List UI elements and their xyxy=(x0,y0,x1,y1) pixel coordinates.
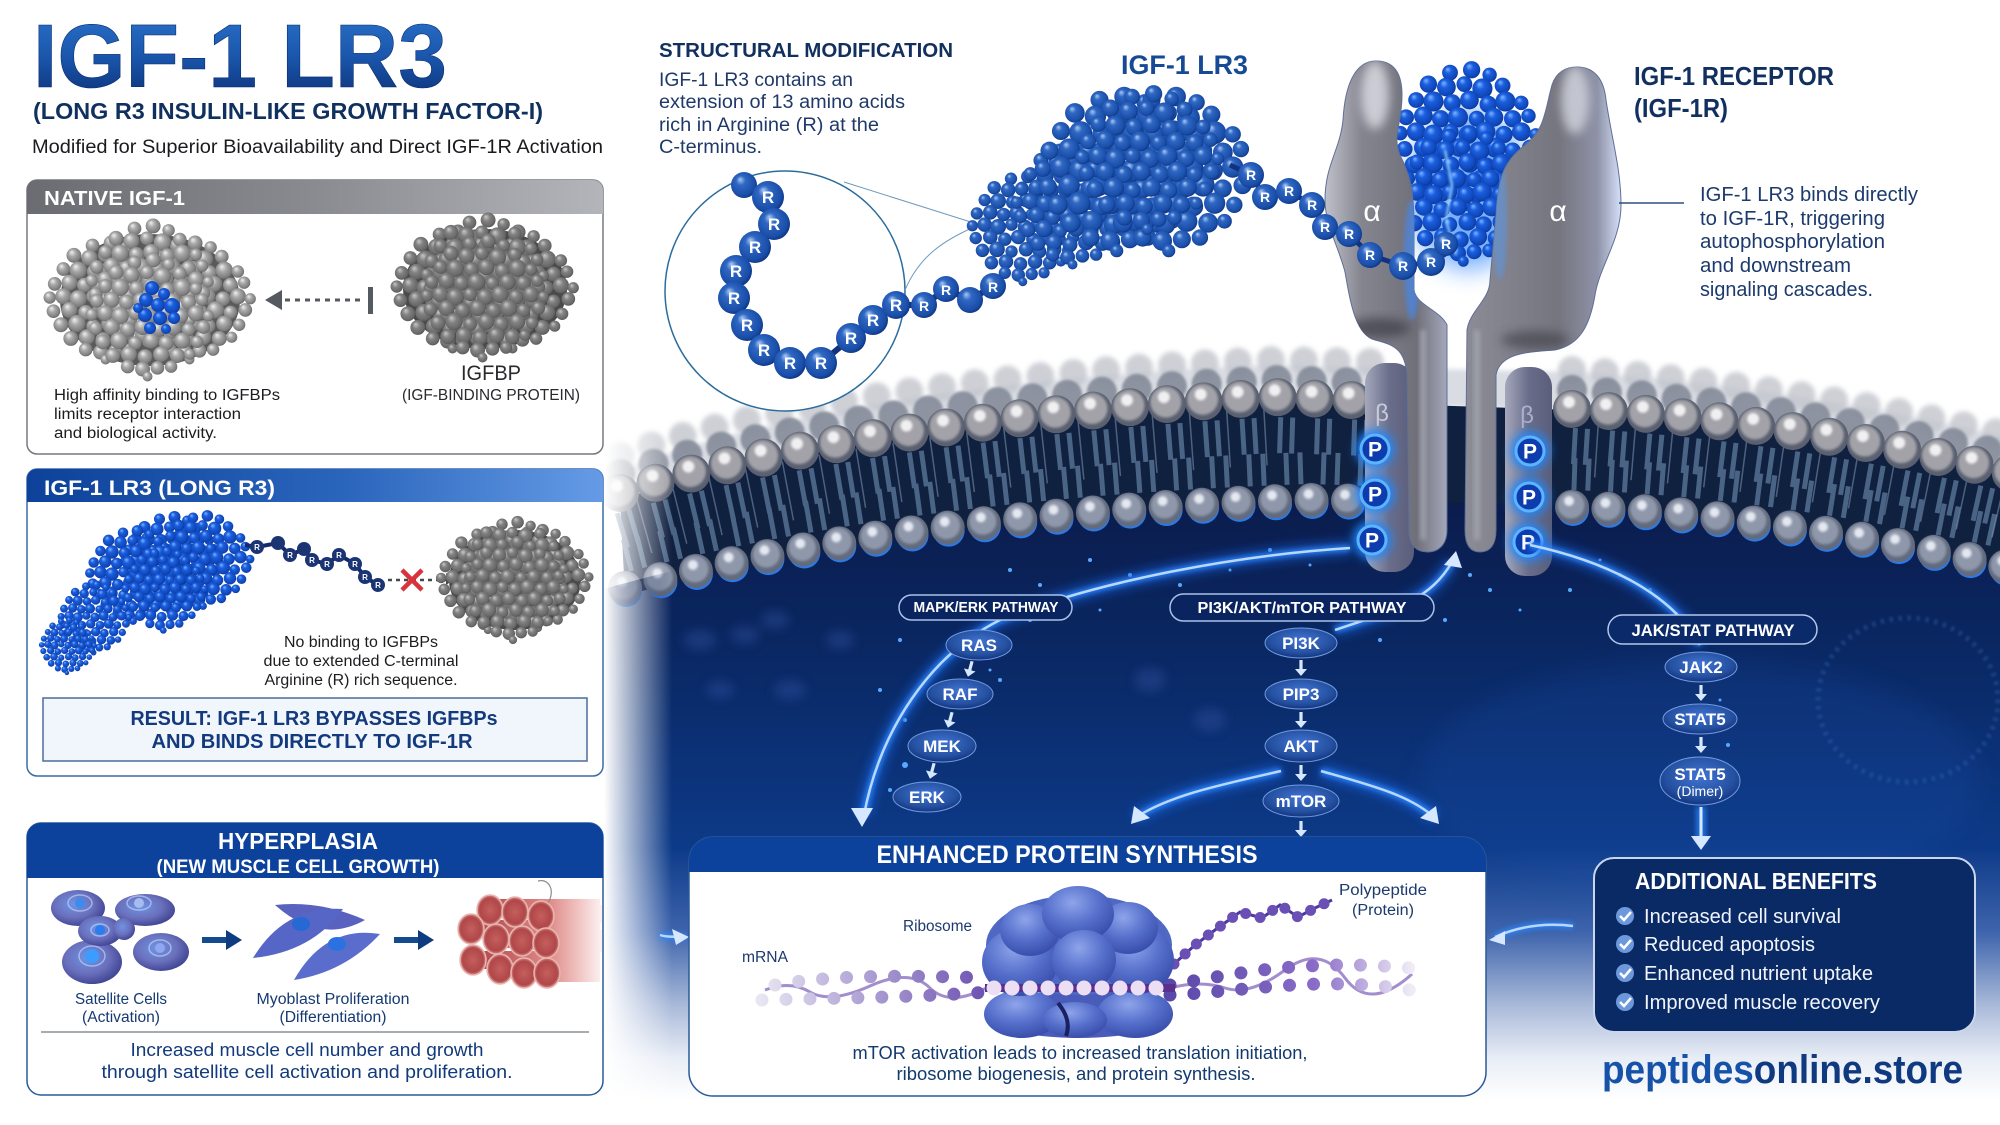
description: limits receptor interaction xyxy=(54,406,241,423)
description: due to extended C-terminal xyxy=(264,653,458,670)
description: and biological activity. xyxy=(54,425,217,442)
description: mTOR activation leads to increased translation initiation, xyxy=(852,1043,1308,1063)
receptor label xyxy=(1634,61,1834,123)
R chain: R xyxy=(730,262,742,281)
subtitle: (LONG R3 INSULIN-LIKE GROWTH FACTOR-I) xyxy=(33,98,543,124)
R chain: R xyxy=(324,560,330,569)
description: Arginine (R) rich sequence. xyxy=(264,672,458,689)
R chain: R xyxy=(890,296,902,315)
receptor description: IGF-1 LR3 binds directly xyxy=(1700,184,1918,206)
linker chain to receptor: R xyxy=(1284,183,1294,199)
R chain: R xyxy=(287,551,293,560)
R chain: R xyxy=(867,311,879,330)
check icons xyxy=(1616,907,1634,1011)
pathway: PI3K/AKT/mTOR: AKT xyxy=(1284,737,1319,756)
beta subunits xyxy=(1365,363,1552,576)
pill label xyxy=(1170,594,1434,621)
blocked arrow xyxy=(388,570,455,590)
satellite cells xyxy=(51,890,189,984)
result callout: RESULT: IGF-1 LR3 BYPASSES IGFBPs xyxy=(130,708,498,730)
R chain: R xyxy=(375,581,381,590)
membrane surface back rows xyxy=(620,360,2000,490)
R chain: R xyxy=(941,282,951,298)
receptor alpha right arm xyxy=(1465,66,1621,552)
label mRNA: mRNA xyxy=(742,949,789,966)
receptor description xyxy=(1700,184,1918,301)
linker chain to receptor: R xyxy=(1426,254,1436,270)
linker chain to receptor: R xyxy=(1365,247,1375,263)
benefits list xyxy=(1644,906,1880,1014)
beta subunits: β xyxy=(1520,402,1534,429)
result callout xyxy=(43,698,587,761)
subheading: (NEW MUSCLE CELL GROWTH) xyxy=(156,857,440,878)
description: ribosome biogenesis, and protein synthesis. xyxy=(896,1064,1256,1084)
cell interior xyxy=(600,480,2000,1125)
panel: enhanced protein synthesis xyxy=(689,837,1486,1096)
phosphate groups right xyxy=(1509,432,1549,561)
native IGF-1 molecule xyxy=(44,219,256,381)
receptor label: (IGF-1R) xyxy=(1634,93,1728,123)
description xyxy=(264,634,458,689)
R chain: R xyxy=(352,560,358,569)
upper lipid heads xyxy=(617,390,2000,493)
cell membrane xyxy=(617,360,2000,596)
linker chain to receptor xyxy=(1230,162,1458,280)
R chain: R xyxy=(762,188,774,207)
R chain: R xyxy=(919,298,929,314)
beta subunits: β xyxy=(1375,400,1389,427)
description: No binding to IGFBPs xyxy=(284,634,438,651)
long arrow xyxy=(1691,807,1711,850)
faint nucleus xyxy=(1818,618,1998,782)
faint bokeh xyxy=(684,611,1226,732)
summary text: through satellite cell activation and proliferation. xyxy=(102,1061,512,1082)
receptor label: IGF-1 RECEPTOR xyxy=(1634,61,1834,91)
panel: native IGF-1 xyxy=(27,180,603,454)
LR3 molecule xyxy=(39,510,254,675)
pathway: JAK/STAT: JAK2 xyxy=(1679,658,1723,677)
phosphate groups right: P xyxy=(1522,486,1536,510)
label polypeptide xyxy=(1339,882,1427,919)
polypeptide chain xyxy=(1174,900,1332,964)
label satellite cells xyxy=(75,991,167,1026)
arrow xyxy=(202,930,242,950)
linker chain to receptor: R xyxy=(1320,219,1330,235)
panel: hyperplasia xyxy=(27,823,603,1095)
pathway: MAPK/ERK: MEK xyxy=(923,737,962,756)
R chain xyxy=(245,536,385,592)
description: High affinity binding to IGFBPs xyxy=(54,387,280,404)
R chain: R xyxy=(815,354,827,373)
label myoblast xyxy=(256,991,410,1026)
pathway: PI3K/AKT/mTOR: PI3K xyxy=(1282,634,1321,653)
R chain: R xyxy=(336,551,342,560)
IGFBP sublabel: (IGF-BINDING PROTEIN) xyxy=(402,387,580,404)
mRNA strand xyxy=(762,959,1412,1000)
ribosome xyxy=(982,886,1175,1038)
receptor description: and downstream xyxy=(1700,255,1851,277)
benefits list: Increased cell survival xyxy=(1644,906,1841,928)
pathway: JAK/STAT: STAT5 xyxy=(1674,710,1726,729)
membrane band xyxy=(620,400,2000,596)
R chain: R xyxy=(728,289,740,308)
R chain: R xyxy=(988,279,998,295)
receptor alpha left arm xyxy=(1325,61,1447,552)
summary text xyxy=(102,1039,512,1082)
pathway: JAK/STAT: (Dimer) xyxy=(1677,783,1723,799)
R chain: R xyxy=(784,354,796,373)
pathway: MAPK/ERK: RAS xyxy=(961,636,997,655)
magnifier circle xyxy=(665,171,974,411)
pathway: JAK/STAT: STAT5 xyxy=(1674,765,1726,784)
IGFBP molecule xyxy=(436,516,594,644)
phosphate groups right: P xyxy=(1521,532,1535,554)
lower lipid heads xyxy=(622,494,2000,591)
panel: IGF-1 LR3 xyxy=(27,469,603,776)
structural modification heading: STRUCTURAL MODIFICATION xyxy=(659,39,953,62)
tagline: Modified for Superior Bioavailability and Direct IGF-1R Activation xyxy=(32,137,603,158)
heading: HYPERPLASIA xyxy=(218,828,378,854)
pathway: MAPK/ERK: RAF xyxy=(943,685,977,704)
label polypeptide: Polypeptide xyxy=(1339,882,1427,899)
signal curves xyxy=(660,545,1700,937)
linker chain to receptor: R xyxy=(1260,189,1270,205)
phosphate groups left xyxy=(1353,430,1394,559)
R chain: R xyxy=(758,341,770,360)
alpha labels: α xyxy=(1549,195,1567,228)
R chain: R xyxy=(845,329,857,348)
heading: ENHANCED PROTEIN SYNTHESIS xyxy=(876,841,1258,869)
pathway: JAK/STAT xyxy=(1608,615,1817,850)
R chain: R xyxy=(362,573,368,582)
R chain: R xyxy=(768,215,780,234)
phosphate groups left: P xyxy=(1368,484,1382,506)
pill label xyxy=(899,595,1072,620)
heading: IGF-1 LR3 (LONG R3) xyxy=(44,477,275,500)
website: peptidesonline.store xyxy=(1602,1048,1963,1092)
label myoblast: (Differentiation) xyxy=(280,1009,386,1026)
pill label: PI3K/AKT/mTOR PATHWAY xyxy=(1198,600,1407,617)
pathway: MAPK/ERK: ERK xyxy=(909,788,946,807)
IGF-1 LR3 molecule xyxy=(967,85,1256,286)
heading: NATIVE IGF-1 xyxy=(44,187,185,210)
benefits list: Reduced apoptosis xyxy=(1644,934,1815,956)
arrowheads xyxy=(672,551,1505,945)
benefits list: Improved muscle recovery xyxy=(1644,992,1880,1014)
myoblasts xyxy=(253,904,380,980)
structural modification text: rich in Arginine (R) at the xyxy=(659,115,879,136)
IGFBP label: IGFBP xyxy=(461,362,521,385)
title: IGF-1 LR3 xyxy=(33,7,447,107)
glowing sparkles xyxy=(878,548,1730,792)
structural modification text: IGF-1 LR3 contains an xyxy=(659,70,853,91)
linker chain to receptor: R xyxy=(1307,197,1317,213)
R chain: R xyxy=(749,238,761,257)
R chain: R xyxy=(309,556,315,565)
pill label: MAPK/ERK PATHWAY xyxy=(914,599,1058,616)
IGFBP molecule xyxy=(391,213,579,362)
heading: ADDITIONAL BENEFITS xyxy=(1635,868,1877,894)
arrow xyxy=(394,930,434,950)
receptor description: to IGF-1R, triggering xyxy=(1700,208,1885,230)
pathway: MAPK/ERK xyxy=(893,595,1072,812)
label ribosome: Ribosome xyxy=(903,918,972,935)
structural modification text xyxy=(659,70,905,158)
structural modification text: C-terminus. xyxy=(659,137,762,158)
alpha labels: α xyxy=(1363,195,1381,228)
receptor description: autophosphorylation xyxy=(1700,231,1885,253)
lipid tails xyxy=(620,435,2000,556)
panel: additional benefits xyxy=(1594,858,1975,1032)
R chain: R xyxy=(254,543,260,552)
result callout: AND BINDS DIRECTLY TO IGF-1R xyxy=(152,731,473,753)
receptor description: signaling cascades. xyxy=(1700,279,1873,301)
linker chain to receptor: R xyxy=(1246,167,1256,183)
pathway: PI3K/AKT/mTOR: mTOR xyxy=(1276,792,1326,811)
pill label: JAK/STAT PATHWAY xyxy=(1632,621,1795,640)
phosphate groups right: P xyxy=(1523,440,1537,464)
IGF-1 LR3 label: IGF-1 LR3 xyxy=(1121,50,1248,80)
pill label xyxy=(1608,615,1817,644)
linker chain to receptor: R xyxy=(1441,236,1451,252)
phosphate groups left: P xyxy=(1365,530,1379,552)
structural modification text: extension of 13 amino acids xyxy=(659,92,905,113)
label satellite cells: (Activation) xyxy=(82,1009,160,1026)
linker chain to receptor: R xyxy=(1344,226,1354,242)
phosphate groups left: P xyxy=(1368,438,1382,462)
pathway: PI3K/AKT/mTOR xyxy=(1170,594,1434,837)
inhibition arrow xyxy=(265,287,373,314)
description xyxy=(852,1043,1308,1084)
R chain xyxy=(718,172,1006,379)
label satellite cells: Satellite Cells xyxy=(75,991,167,1008)
ligand inside receptor xyxy=(1393,61,1542,270)
leader line xyxy=(1619,202,1684,204)
label polypeptide: (Protein) xyxy=(1352,902,1414,919)
alpha labels xyxy=(1363,195,1567,228)
description xyxy=(54,387,280,442)
summary text: Increased muscle cell number and growth xyxy=(130,1039,484,1060)
linker chain to receptor: R xyxy=(1398,258,1408,274)
label myoblast: Myoblast Proliferation xyxy=(256,991,410,1008)
muscle fibres xyxy=(458,881,602,988)
R chain: R xyxy=(741,316,753,335)
benefits list: Enhanced nutrient uptake xyxy=(1644,963,1873,985)
pathway: PI3K/AKT/mTOR: PIP3 xyxy=(1283,685,1319,704)
